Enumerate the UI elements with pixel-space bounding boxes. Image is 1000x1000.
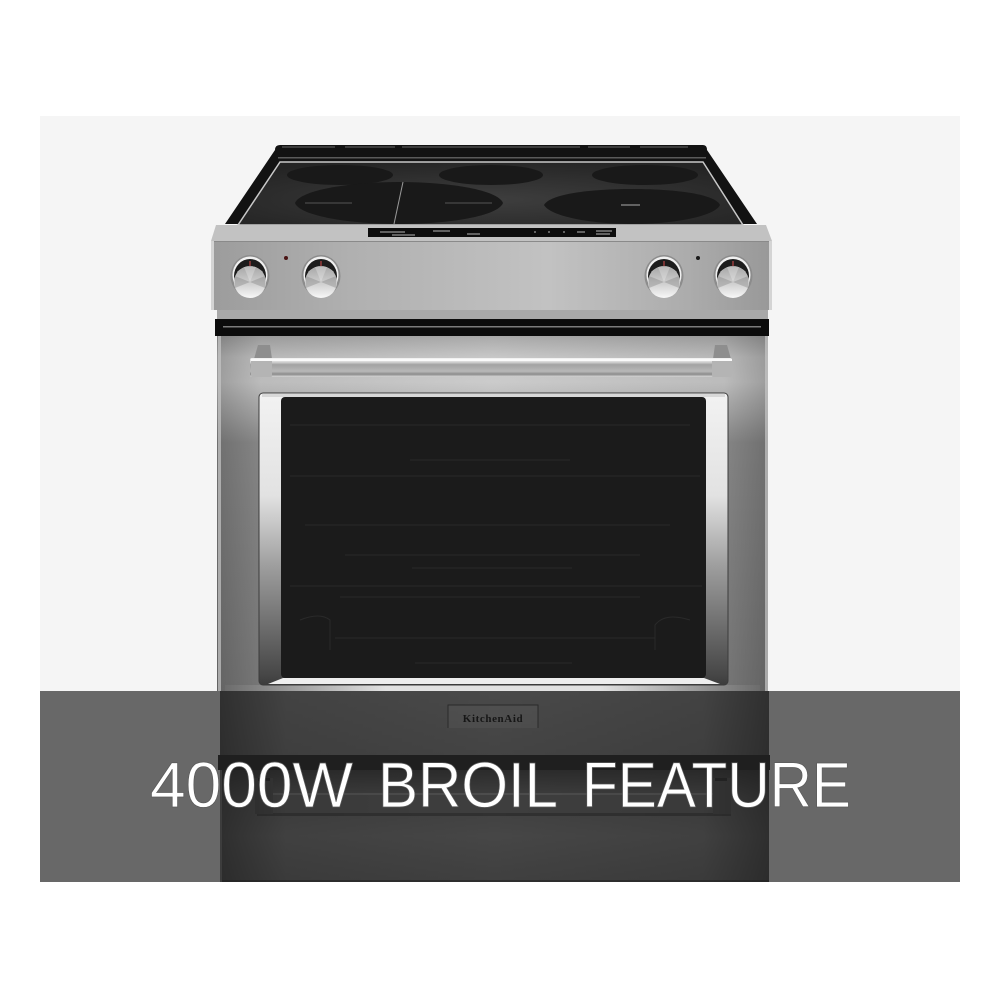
control display	[368, 228, 616, 237]
window glass	[281, 397, 706, 678]
caption text: BROIL	[378, 749, 558, 821]
range appliance	[211, 145, 772, 882]
door window frame	[259, 393, 728, 685]
oven racks	[290, 425, 702, 663]
indicator lights	[284, 256, 700, 260]
caption text: FEATURE	[582, 749, 851, 821]
console panel	[211, 225, 772, 310]
cooktop	[225, 145, 757, 225]
door handle	[250, 345, 732, 377]
brand plate: KitchenAid	[463, 713, 523, 725]
lower panel	[218, 691, 770, 882]
cooktop burners	[287, 165, 720, 224]
caption text	[150, 749, 851, 821]
brand plate	[448, 705, 538, 728]
caption text: 4000W	[150, 749, 354, 821]
control knobs	[230, 255, 752, 298]
oven door	[217, 336, 768, 691]
background panel	[40, 116, 960, 882]
trim and vent	[215, 310, 769, 336]
caption band	[40, 691, 960, 882]
